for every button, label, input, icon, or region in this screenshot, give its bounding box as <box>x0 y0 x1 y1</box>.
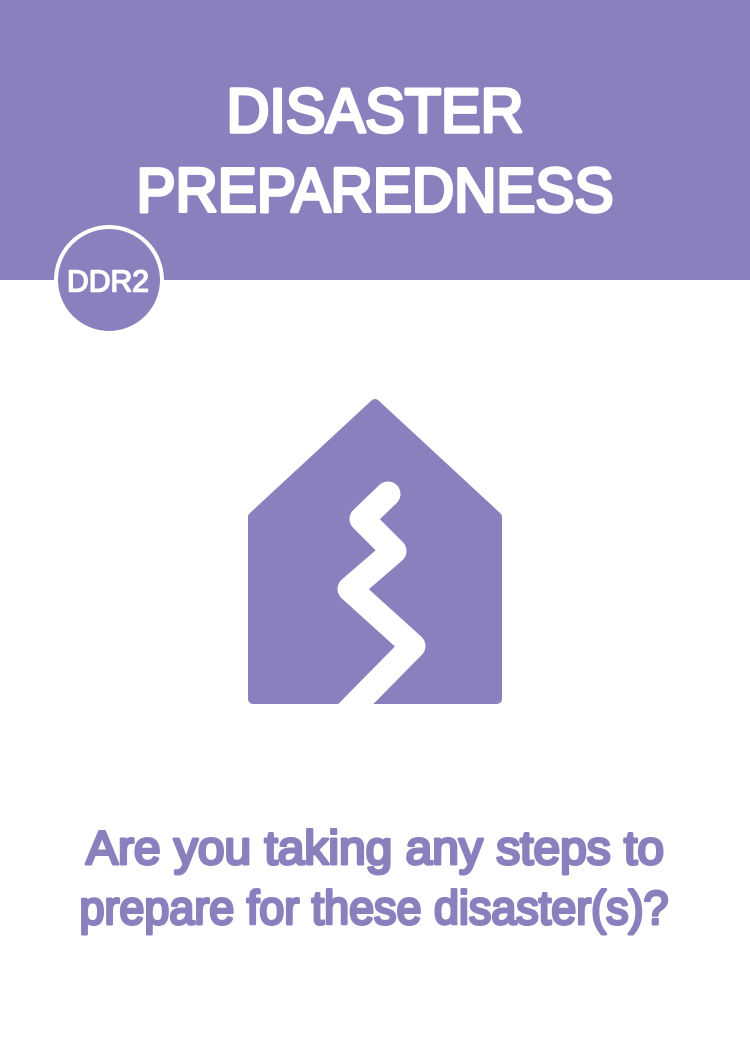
title <box>136 77 614 226</box>
question text: Are you taking any steps to <box>86 821 664 874</box>
title: PREPAREDNESS <box>136 156 614 226</box>
question text <box>80 821 668 936</box>
icon: house with crack <box>248 399 502 704</box>
badge: DDR2 <box>54 225 164 331</box>
badge: DDR2: DDR2 <box>67 264 149 298</box>
title: DISASTER <box>226 77 524 146</box>
question text: prepare for these disaster(s)? <box>80 881 668 934</box>
header band <box>0 0 750 280</box>
